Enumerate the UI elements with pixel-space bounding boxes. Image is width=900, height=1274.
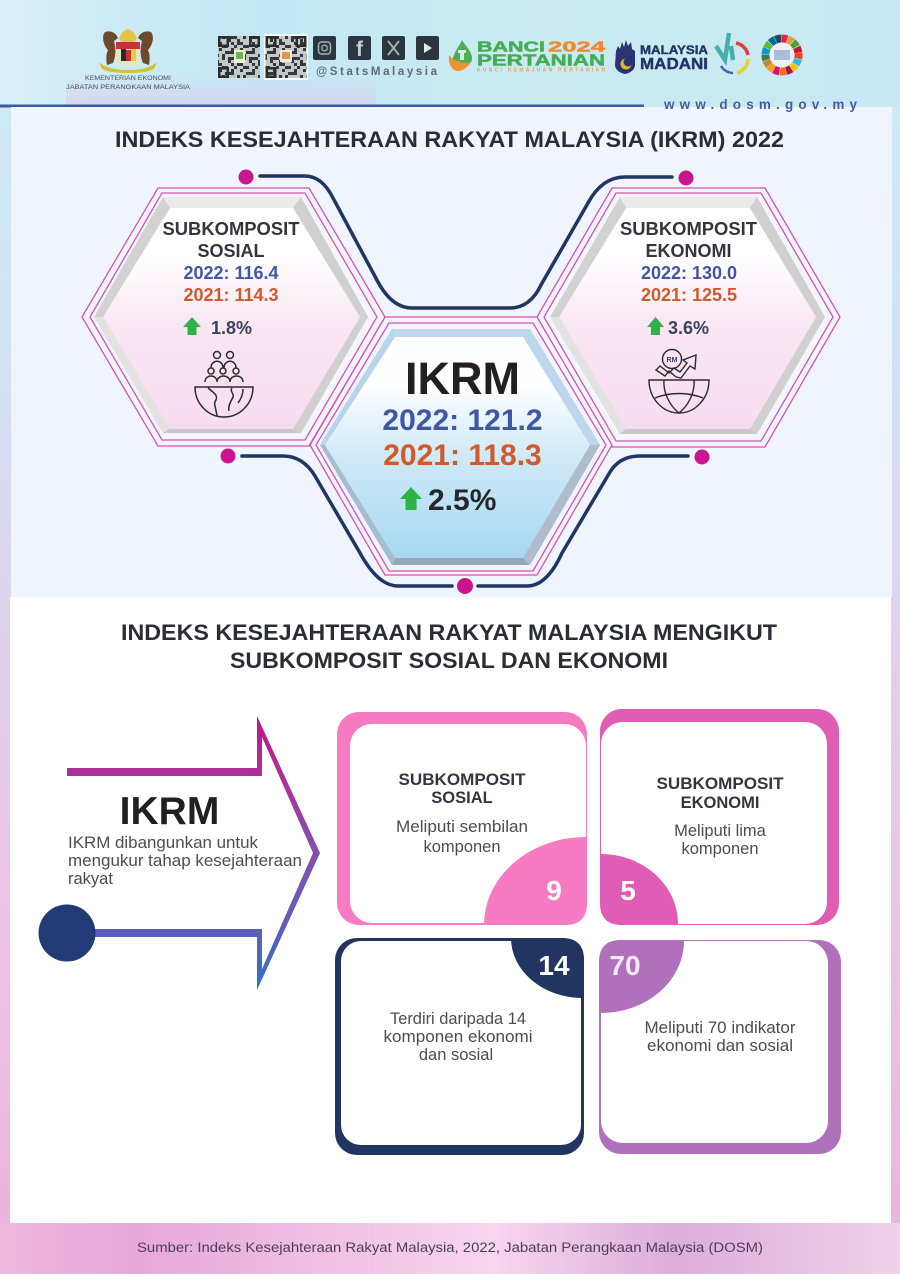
panel: IKRM hexagon [310,317,612,575]
logo: Banci Pertanian 2024: BANCI [477,38,545,56]
card: social component [337,712,587,925]
heading: by sub-composite: SUBKOMPOSIT SOSIAL DAN EKONOMI [230,648,668,673]
shield [116,42,140,67]
social 2022 value: 2022: 116.4 [183,263,279,283]
social label [162,219,300,261]
icon: up arrow [647,317,664,335]
IKRM 2021 value: 2021: 118.3 [383,439,542,472]
card heading [398,771,526,807]
panel: national index [11,107,892,597]
panel: economic hexagon [537,188,840,447]
economic label: SUBKOMPOSIT [620,219,757,239]
dot: top left [238,170,254,184]
QR code 2 [264,34,308,80]
card: seventy indicators [599,940,841,1154]
social icon: facebook [348,36,371,61]
heading: IKRM 2022: INDEKS KESEJAHTERAAN RAKYAT MALAYSIA (IKRM) 2022 [115,127,784,152]
card text: komponen ekonomi [384,1028,532,1046]
economic 2021 value: 2021: 125.5 [641,285,737,305]
arrow outline [67,716,320,990]
connector lines: top [238,170,694,308]
card text: Meliputi 70 indikator [644,1019,796,1037]
social change: 1.8% [211,318,252,338]
panel: social hexagon [82,188,385,446]
card text: komponen [681,840,759,858]
connector lines: bottom [220,448,710,594]
dot: bottom right [694,450,710,464]
scroll [99,62,157,73]
icon: up arrow [183,317,201,335]
social 2021 value: 2021: 114.3 [183,285,279,305]
icon: leaf emblem [449,40,472,71]
heading: by sub-composite [121,620,778,673]
card text: Terdiri daripada 14 [390,1010,526,1028]
card text [644,1019,796,1055]
card text: komponen [423,838,501,856]
logo: Banci Pertanian 2024: 2024 [548,38,606,56]
arrow heading: IKRM: IKRM [120,790,219,833]
social icon: facebook: f [356,38,364,61]
economic label [620,219,757,261]
social handle: @StatsMalaysia [316,66,438,78]
logo: Banci Pertanian 2024: PERTANIAN [477,52,605,70]
card text [674,822,767,858]
dot: bottom left [220,448,236,464]
card text: Meliputi lima [674,822,767,840]
number: 70: 70 [609,950,641,981]
icon: growth on globe [649,350,709,413]
logo: Malaysia Madani: MADANI [640,56,708,73]
QR code 1 [218,36,260,78]
economic label: EKONOMI [645,241,732,261]
website address: www.dosm.gov.my [663,97,857,112]
icon: up arrow [400,487,422,510]
icon: people on globe [195,352,253,417]
dot: top right [678,170,694,186]
logo: SDG wheel [759,32,805,78]
logo: Malaysia Madani [615,40,708,74]
crest [119,29,137,43]
logo: Malaysia Madani: MALAYSIA [640,43,708,57]
arrow description [68,834,302,888]
panel: sub-composite breakdown [10,597,891,1223]
header rule [0,104,644,108]
source note: Sumber: Indeks Kesejahteraan Rakyat Malaysia, 2022, Jabatan Perangkaan Malaysia (DOSM) [137,1240,763,1255]
IKRM change: 2.5% [428,484,496,517]
card text: dan sosial [419,1046,493,1064]
arrow base circle [38,904,96,962]
economic 2022 value: 2022: 130.0 [641,263,737,283]
card heading [656,775,784,812]
ministry name: JABATAN PERANGKAAN MALAYSIA [66,84,190,91]
social label: SOSIAL [197,241,265,261]
arrow description: IKRM dibangunkan untuk [68,834,259,852]
economic change: 3.6% [668,318,709,338]
left tiger [103,31,118,65]
arrow description: mengukur tahap kesejahteraan [68,852,302,870]
heading: by sub-composite: INDEKS KESEJAHTERAAN RAKYAT MALAYSIA MENGIKUT [121,620,778,645]
social icon: X [382,36,405,60]
footer band [0,1223,900,1274]
logo: Banci Pertanian 2024 [449,38,606,74]
card text: Meliputi sembilan [396,818,528,836]
IKRM label: IKRM [405,353,520,404]
card: fourteen components [335,938,584,1155]
ministry name [66,75,190,91]
card heading: EKONOMI [681,794,759,812]
dot: bottom centre [457,578,473,594]
ministry name: KEMENTERIAN EKONOMI [85,75,171,82]
card: economic component [600,709,839,925]
card text [384,1010,532,1064]
logo: V emblem [716,33,748,73]
header band [0,0,900,108]
number: 5: 5 [620,875,636,906]
social label: SUBKOMPOSIT [162,219,300,239]
social icon: instagram [313,36,336,60]
icon: growth on globe: RM [667,357,678,364]
card heading: SOSIAL [431,789,493,807]
card heading: SUBKOMPOSIT [656,775,784,793]
social icon: youtube [416,36,439,60]
right tiger [138,31,153,65]
IKRM 2022 value: 2022: 121.2 [382,404,543,437]
card heading: SUBKOMPOSIT [398,771,526,789]
arrow description: rakyat [68,870,113,888]
card text: ekonomi dan sosial [647,1037,793,1055]
card text [396,818,528,856]
icon: hand [615,40,635,74]
logo: coat of arms [99,29,157,73]
number: 9: 9 [546,875,562,906]
number: 14: 14 [538,950,570,981]
logo: Banci Pertanian 2024: KUNCI KEMAJUAN PERTANIAN [477,68,605,74]
